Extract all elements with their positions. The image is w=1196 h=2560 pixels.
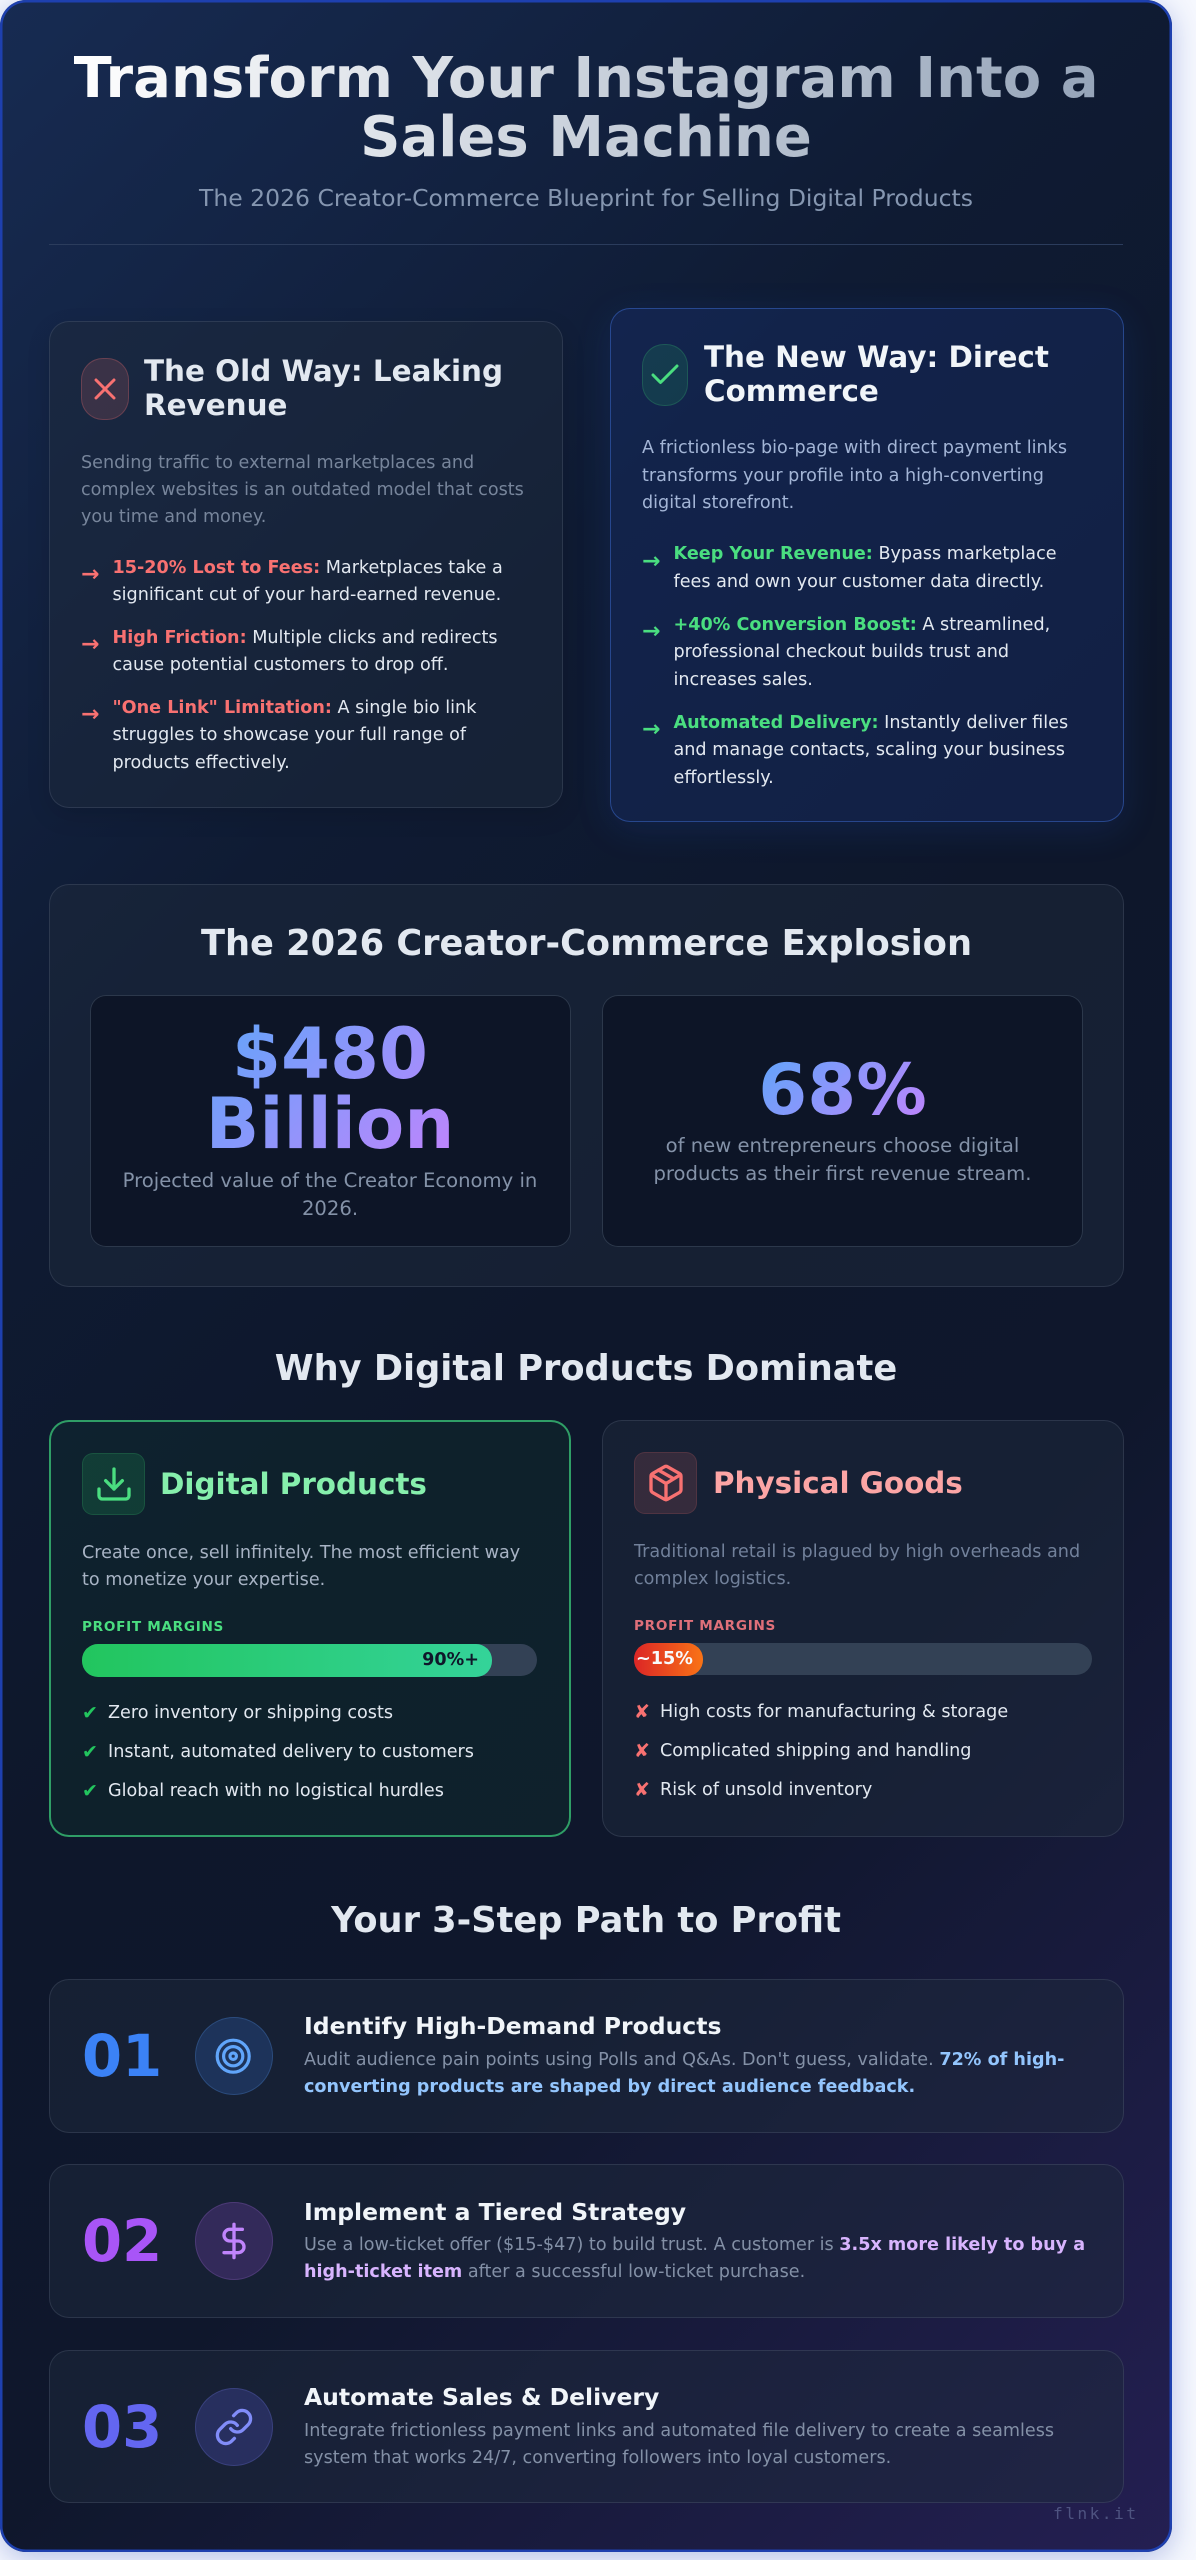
arrow: → — [81, 562, 99, 587]
bullet: delivery: effortlessly. — [674, 768, 774, 788]
value fill — [634, 1643, 703, 1676]
bullet: friction — [112, 628, 498, 675]
bullet: fees: significant cut of your hard-earned revenue. — [112, 585, 501, 605]
heading: The 2026 Creator-Commerce Explosion — [201, 923, 972, 964]
caption: products as their first revenue stream. — [654, 1162, 1031, 1185]
list — [82, 1702, 474, 1802]
description — [642, 438, 1067, 513]
bullet: friction: High Friction: Multiple clicks and redirects — [112, 628, 498, 648]
drawback: Complicated shipping and handling — [660, 1741, 971, 1761]
drawback: Risk of unsold inventory — [660, 1780, 872, 1800]
heading — [144, 354, 503, 422]
description — [82, 1542, 520, 1590]
icon: red x — [81, 358, 129, 420]
arrow: → — [81, 632, 99, 657]
check: ✔ — [82, 1702, 98, 1724]
value fill: 90%+ — [422, 1650, 479, 1670]
description: digital storefront. — [642, 493, 794, 513]
benefit: Zero inventory or shipping costs — [108, 1703, 393, 1723]
title: Transform Your Instagram Into a — [74, 46, 1098, 111]
bullet: delivery — [674, 713, 1068, 788]
bar: 90 percent — [82, 1644, 537, 1676]
step 2 — [49, 2164, 1124, 2318]
bullet: conversion: +40% Conversion Boost: A streamlined, — [674, 615, 1050, 635]
stat: 68 percent — [602, 995, 1083, 1247]
description: transforms your profile into a high-converting — [642, 466, 1044, 486]
panel: digital products — [49, 1420, 571, 1837]
caption — [123, 1169, 537, 1220]
caption — [654, 1134, 1031, 1185]
bullet: delivery: Automated Delivery: Instantly deliver files — [674, 713, 1068, 733]
number: 02 — [82, 2208, 162, 2275]
description: to monetize your expertise. — [82, 1570, 325, 1590]
bullet list — [642, 544, 1068, 788]
icon: package — [634, 1452, 697, 1514]
heading — [704, 340, 1049, 408]
icon: link — [194, 2388, 272, 2466]
cross: ✘ — [634, 1740, 650, 1762]
title: Sales Machine — [360, 105, 812, 170]
step text: converting products are shaped by direct audience feedback. — [304, 2077, 915, 2097]
step 3 — [49, 2350, 1124, 2503]
icon: green check — [642, 344, 688, 406]
number: 01 — [82, 2023, 162, 2090]
description: A frictionless bio-page with direct payment links — [642, 438, 1067, 458]
bullet: fees: 15-20% Lost to Fees: Marketplaces take a — [112, 558, 503, 578]
panel: the old way — [49, 321, 563, 808]
bar: 15 percent — [634, 1643, 1092, 1675]
benefit: Instant, automated delivery to customers — [108, 1742, 474, 1762]
cross: ✘ — [634, 1778, 650, 1800]
step 1 — [49, 1979, 1124, 2133]
arrow: → — [642, 549, 660, 574]
description: Sending traffic to external marketplaces and — [81, 452, 474, 472]
arrow: → — [81, 702, 99, 727]
step text: system that works 24/7, converting followers into loyal customers. — [304, 2448, 891, 2468]
step text — [304, 2421, 1054, 2468]
caption: 2026. — [302, 1197, 358, 1220]
watermark: flnk.it — [1053, 2504, 1138, 2523]
value: 68% — [758, 1049, 927, 1131]
bullet: conversion — [674, 615, 1050, 690]
bullet: one link — [112, 698, 476, 773]
heading: why digital: Why Digital Products Dominate — [275, 1348, 897, 1389]
heading: Digital Products — [160, 1467, 427, 1501]
description: complex websites is an outdated model that costs — [81, 480, 524, 500]
step text — [304, 2235, 1085, 2282]
bullet list — [81, 558, 503, 773]
cross: ✘ — [634, 1700, 650, 1722]
header — [49, 46, 1123, 245]
icon: target — [194, 2017, 272, 2095]
list — [634, 1700, 1008, 1800]
description: Create once, sell infinitely. The most efficient way — [82, 1542, 520, 1562]
value fill — [82, 1644, 492, 1677]
bullet: one link: struggles to showcase your full range of — [112, 725, 466, 745]
bullet: conversion: professional checkout builds trust and — [674, 642, 1009, 662]
value: $480 — [232, 1013, 428, 1095]
icon: dollar — [194, 2202, 272, 2280]
bullet: fees — [112, 558, 503, 605]
value fill: ~15% — [636, 1649, 693, 1669]
icon: download — [82, 1453, 145, 1515]
value — [206, 1013, 454, 1165]
check: ✔ — [82, 1740, 98, 1762]
heading: Revenue — [144, 388, 287, 422]
description: Traditional retail is plagued by high overheads and — [634, 1542, 1080, 1562]
heading: Commerce — [704, 374, 879, 408]
heading: 3-step path: Your 3-Step Path to Profit — [331, 1900, 841, 1940]
bullet: revenue — [674, 544, 1057, 592]
label: PROFIT MARGINS — [634, 1618, 776, 1634]
heading: The Old Way: Leaking — [144, 354, 503, 388]
number: 03 — [82, 2394, 162, 2461]
stat: 480 billion — [90, 995, 570, 1247]
value: Billion — [206, 1083, 454, 1165]
description — [81, 452, 524, 527]
step text — [304, 2050, 1064, 2097]
step text: high-ticket item after a successful low-ticket purchase. — [304, 2262, 805, 2282]
bullet: one link: products effectively. — [112, 753, 290, 773]
subtitle: The 2026 Creator-Commerce Blueprint for Selling Digital Products — [199, 184, 973, 212]
step text: Audit audience pain points using Polls and Q&As. Don't guess, validate. 72% of high- — [304, 2050, 1064, 2070]
caption: Projected value of the Creator Economy in — [123, 1169, 537, 1192]
heading: The New Way: Direct — [704, 340, 1049, 374]
heading: Physical Goods — [713, 1466, 963, 1500]
description: you time and money. — [81, 507, 266, 527]
bullet: revenue: fees and own your customer data directly. — [674, 572, 1044, 592]
step text: Integrate frictionless payment links and automated file delivery to create a seamless — [304, 2421, 1054, 2441]
arrow: → — [642, 717, 660, 742]
step title: Identify High-Demand Products — [304, 2012, 721, 2040]
panel: creator-commerce explosion — [49, 884, 1124, 1287]
step text: Use a low-ticket offer ($15-$47) to build trust. A customer is 3.5x more likely to buy a — [304, 2235, 1085, 2255]
bullet: conversion: increases sales. — [674, 670, 813, 690]
step title: Automate Sales & Delivery — [304, 2382, 659, 2410]
panel: physical goods — [602, 1420, 1124, 1837]
label: PROFIT MARGINS — [82, 1619, 224, 1635]
bullet: friction: cause potential customers to drop off. — [112, 655, 448, 675]
step title: Implement a Tiered Strategy — [304, 2198, 686, 2226]
arrow: → — [642, 619, 660, 644]
bullet: revenue: Keep Your Revenue: Bypass marketplace — [674, 544, 1057, 564]
benefit: Global reach with no logistical hurdles — [108, 1781, 444, 1801]
description: complex logistics. — [634, 1569, 791, 1589]
title — [74, 46, 1098, 170]
panel: the new way — [610, 308, 1124, 822]
drawback: High costs for manufacturing & storage — [660, 1702, 1008, 1722]
check: ✔ — [82, 1780, 98, 1802]
bullet: one link: "One Link" Limitation: A single bio link — [112, 698, 476, 718]
bullet: delivery: and manage contacts, scaling your business — [674, 740, 1065, 760]
description — [634, 1542, 1080, 1589]
caption: of new entrepreneurs choose digital — [666, 1134, 1019, 1157]
